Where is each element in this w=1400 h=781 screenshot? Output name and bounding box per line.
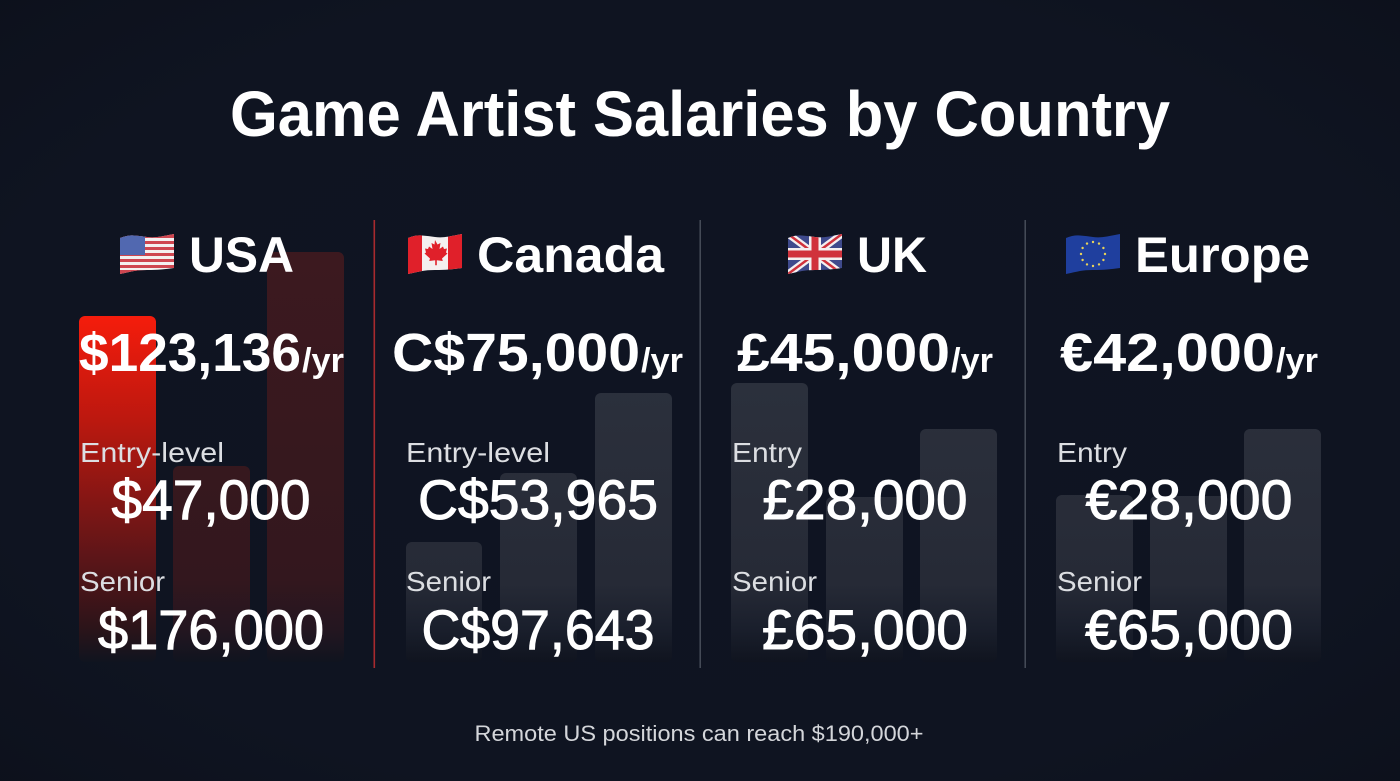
heading: UK: UK	[857, 227, 927, 283]
value: senior: C$97,643	[422, 598, 654, 661]
divider: UK/Europe	[1024, 220, 1026, 668]
divider: Canada/UK	[700, 220, 701, 668]
bar chart: Canada	[406, 393, 672, 662]
average salary: UK: /yr	[951, 342, 993, 380]
label: senior: Senior	[80, 566, 165, 597]
value: senior: £65,000	[762, 598, 968, 661]
label: entry-level: Entry-level	[406, 437, 550, 468]
icon: Canadian flag	[408, 234, 462, 274]
panel: USA	[79, 227, 344, 662]
label: senior: Senior	[732, 566, 817, 597]
label: entry: Entry	[732, 437, 802, 468]
label: entry-level: Entry-level	[80, 437, 224, 468]
panel: UK	[731, 227, 997, 662]
label: entry: Entry	[1057, 437, 1127, 468]
value: entry: £28,000	[762, 468, 968, 531]
value: senior: €65,000	[1085, 598, 1293, 661]
footnote: Remote US positions can reach $190,000+	[474, 721, 924, 746]
divider: USA/Canada	[374, 220, 375, 668]
average salary: Europe: €42,000	[1060, 323, 1275, 383]
label: senior: Senior	[406, 566, 491, 597]
icon: US flag	[120, 234, 174, 274]
bar chart: USA	[79, 252, 344, 662]
panel: Europe	[1056, 227, 1321, 662]
panel: Canada	[392, 227, 683, 662]
label: senior: Senior	[1057, 566, 1142, 597]
average salary: Canada: C$75,000	[392, 323, 640, 383]
bar chart: UK	[731, 383, 997, 662]
value: entry: €28,000	[1086, 468, 1292, 531]
value: senior: $176,000	[98, 598, 324, 661]
value: entry-level: $47,000	[112, 468, 310, 531]
heading: Canada: Canada	[477, 227, 665, 283]
average salary: Europe: /yr	[1276, 342, 1318, 380]
icon: UK flag	[788, 234, 842, 274]
title: Game Artist Salaries by Country	[230, 78, 1170, 150]
average salary: USA: $123,136	[79, 323, 301, 383]
heading: USA: USA	[189, 227, 294, 283]
heading: Europe: Europe	[1135, 227, 1310, 283]
average salary: UK: £45,000	[737, 323, 950, 383]
average salary: Canada: /yr	[641, 342, 683, 380]
icon: EU flag	[1066, 234, 1120, 274]
average salary: USA: /yr	[302, 342, 344, 380]
bar chart: Europe	[1056, 429, 1321, 662]
value: entry-level: C$53,965	[418, 468, 658, 531]
